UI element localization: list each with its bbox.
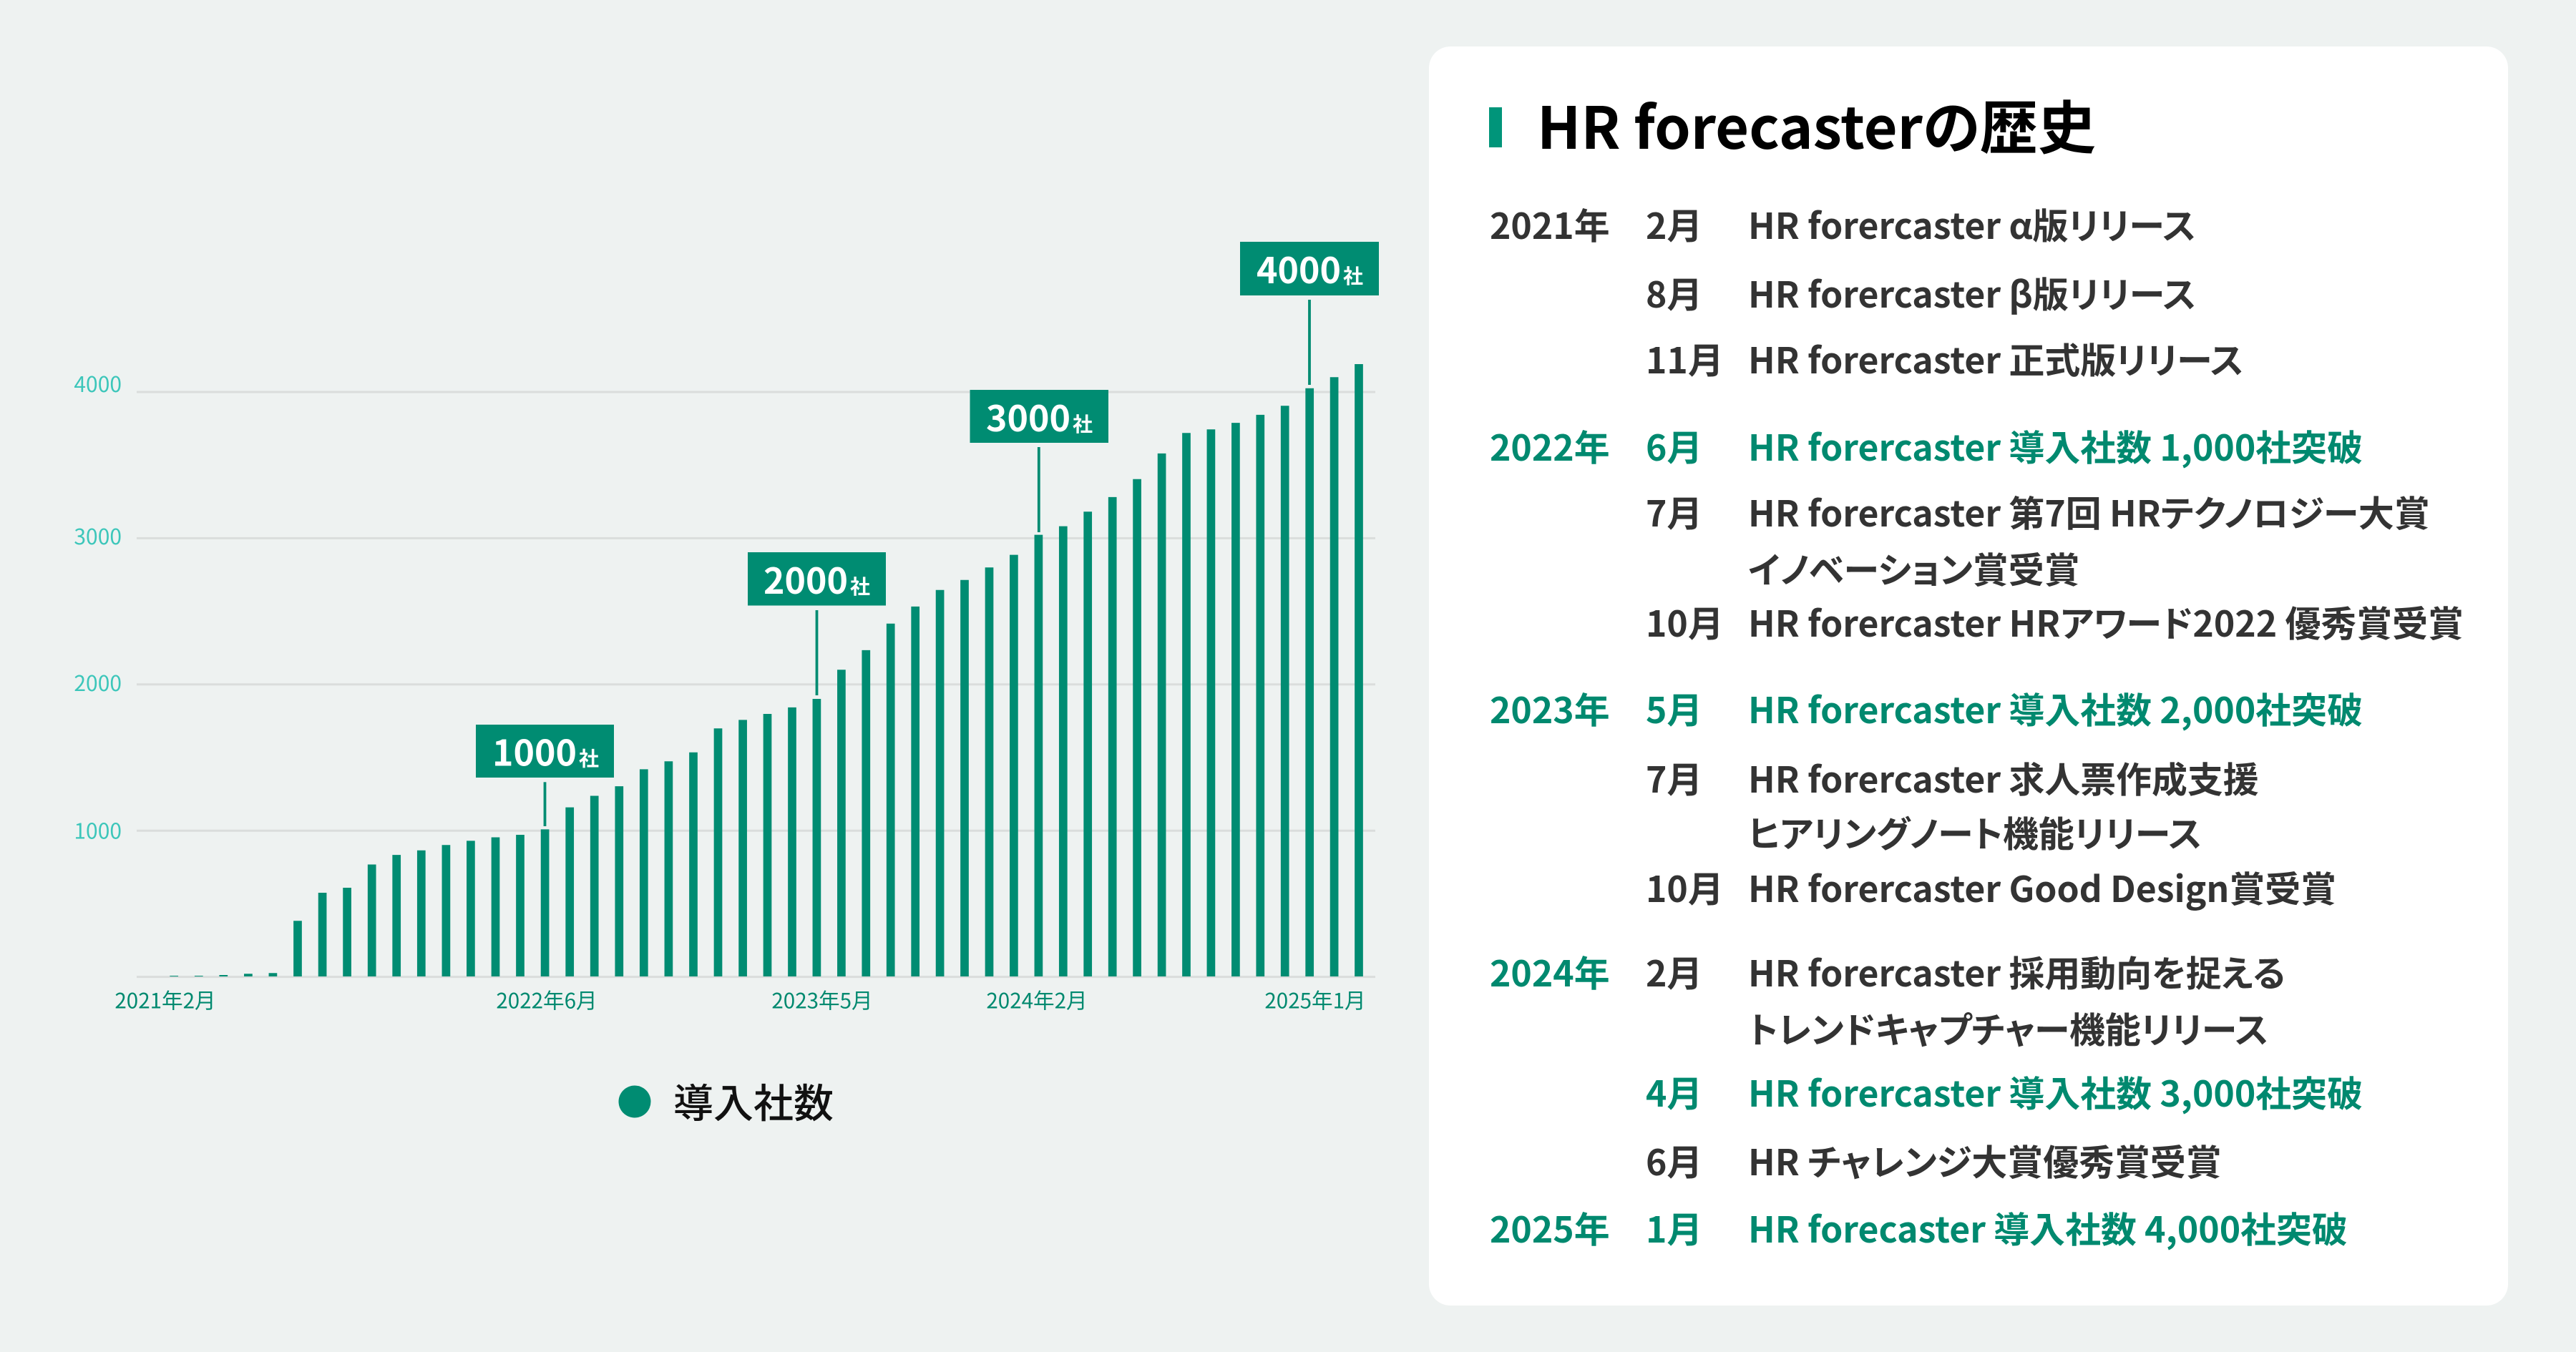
callout: 1000 companies: [476, 725, 614, 826]
row: 2024 April: 4月: [1646, 1066, 1702, 1117]
y axis labels: 2000: [74, 666, 122, 697]
heading accent bar: [1489, 107, 1502, 147]
row: 2021 February: 2月: [1646, 198, 1702, 250]
callout: 4000 companies: 4000社: [1257, 243, 1363, 294]
row: 2024 February: 2月: [1646, 946, 1702, 997]
row: 2025 January: [1490, 1202, 2348, 1253]
y axis labels: 3000: [74, 519, 122, 551]
callout: 2000 companies: 2000社: [763, 553, 870, 604]
x axis labels: 2022年6月: [496, 984, 597, 1014]
x axis labels: 2024年2月: [986, 984, 1088, 1014]
row: 2023 July: HR forercaster 求人票作成支援: [1748, 752, 2259, 803]
x axis labels: 2021年2月: [114, 984, 216, 1014]
row: 2022 October: HR forercaster HRアワード2022 優秀賞受賞: [1748, 596, 2464, 647]
row: 2024 February continued: トレンドキャプチャー機能リリース: [1748, 1002, 2268, 1054]
row: 2021 February: [1490, 198, 2196, 250]
row: 2025 January: 1月: [1646, 1202, 1702, 1253]
x axis labels: [114, 984, 1366, 1014]
row: 2021 August: 8月: [1646, 267, 1702, 318]
row: 2023 July: 7月: [1646, 752, 1702, 803]
row: 2023 October: 10月: [1646, 861, 1724, 913]
legend: 導入社数: [673, 1072, 834, 1130]
row: 2023 October: HR forercaster Good Design賞受賞: [1748, 861, 2336, 913]
row: 2021 November: 11月: [1646, 333, 1724, 384]
row: 2023 July continued: ヒアリングノート機能リリース: [1748, 806, 2202, 858]
row: 2024 February: HR forercaster 採用動向を捉える: [1748, 946, 2285, 997]
row: 2024 February: 2024年: [1490, 946, 1610, 997]
row: 2022 July continued: イノベーション賞受賞: [1748, 542, 2079, 594]
row: 2024 April: HR forercaster 導入社数 3,000社突破: [1748, 1066, 2363, 1117]
row: 2022 June: 6月: [1646, 420, 1702, 471]
row: 2023 May: HR forercaster 導入社数 2,000社突破: [1748, 682, 2363, 734]
row: 2022 June: HR forercaster 導入社数 1,000社突破: [1748, 420, 2363, 471]
row: 2022 July: HR forercaster 第7回 HRテクノロジー大賞: [1748, 486, 2430, 537]
row: 2022 July: 7月: [1646, 486, 1702, 537]
callout: 2000 companies: [748, 552, 886, 695]
callout: 1000 companies: 1000社: [492, 725, 599, 777]
row: 2022 October: 10月: [1646, 596, 1724, 647]
callout: 3000 companies: 3000社: [986, 391, 1093, 442]
row: 2022 June: 2022年: [1490, 420, 1610, 471]
row: 2021 November: HR forercaster 正式版リリース: [1748, 333, 2244, 384]
y axis labels: [74, 367, 122, 846]
row: 2023 May: 2023年: [1490, 682, 1610, 734]
y axis labels: 4000: [74, 367, 122, 398]
row: 2024 June: HR チャレンジ大賞優秀賞受賞: [1748, 1135, 2222, 1186]
bars: [174, 364, 1359, 976]
callout: 4000 companies: [1240, 242, 1379, 385]
y axis labels: 1000: [74, 814, 122, 846]
heading: HR forecasterの歴史: [1537, 82, 2096, 166]
row: 2021 August: HR forercaster β版リリース: [1748, 267, 2196, 318]
row: 2025 January: 2025年: [1490, 1202, 1610, 1253]
row: 2021 February: 2021年: [1490, 198, 1610, 250]
panel: history timeline: [1429, 46, 2508, 1306]
callout: 3000 companies: [970, 390, 1108, 532]
x axis labels: 2025年1月: [1264, 984, 1366, 1014]
row: 2021 February: HR forercaster α版リリース: [1748, 198, 2196, 250]
row: 2025 January: HR forecaster 導入社数 4,000社突破: [1748, 1202, 2348, 1253]
row: 2023 May: 5月: [1646, 682, 1702, 734]
chart: number of companies adopting HR forecaster: [74, 242, 1379, 1130]
row: 2024 February: [1490, 946, 2285, 997]
row: 2024 June: 6月: [1646, 1135, 1702, 1186]
x axis labels: 2023年5月: [771, 984, 873, 1014]
